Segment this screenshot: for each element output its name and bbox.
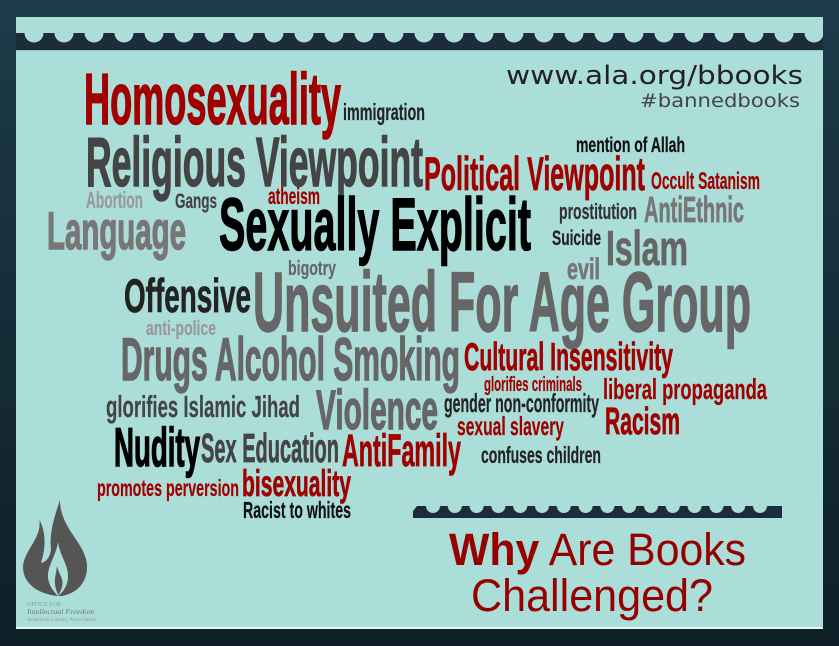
- logo text: Intellectual Freedom: [26, 607, 95, 616]
- word cloud: AntiEthnic: [644, 189, 744, 230]
- icon: flame logo: [23, 500, 87, 596]
- word cloud: Sex Education: [201, 425, 339, 471]
- word cloud: Occult Satanism: [651, 168, 760, 195]
- word cloud: [47, 60, 768, 523]
- word cloud: prostitution: [559, 199, 637, 224]
- word cloud: promotes perversion: [97, 475, 239, 501]
- word cloud: confuses children: [481, 442, 601, 468]
- word cloud: bisexuality: [242, 463, 351, 504]
- word cloud: Language: [47, 202, 186, 261]
- word cloud: Islam: [606, 222, 688, 276]
- word cloud: evil: [567, 253, 600, 286]
- word cloud: Racism: [605, 401, 680, 443]
- logo text: OFFICE FOR: [27, 601, 62, 608]
- word cloud: Abortion: [86, 187, 143, 213]
- word cloud: Offensive: [124, 269, 251, 322]
- website url: www.ala.org/bbooks: [506, 61, 803, 91]
- word cloud: sexual slavery: [457, 411, 564, 441]
- top scalloped band: [16, 17, 823, 51]
- word cloud: glorifies Islamic Jihad: [106, 389, 300, 424]
- word cloud: anti-police: [146, 318, 216, 340]
- word cloud: Homosexuality: [84, 60, 341, 140]
- logo text: American Library Association: [27, 618, 97, 623]
- heading: [449, 524, 746, 621]
- word cloud: Sexually Explicit: [219, 183, 531, 266]
- word cloud: Cultural Insensitivity: [464, 336, 673, 379]
- heading: Why Are Books: [449, 524, 746, 575]
- word cloud: Religious Viewpoint: [86, 123, 423, 201]
- word cloud: bigotry: [288, 258, 337, 280]
- word cloud: Political Viewpoint: [424, 147, 645, 200]
- word cloud: Violence: [316, 378, 438, 441]
- word cloud: Drugs Alcohol Smoking: [121, 326, 460, 393]
- word cloud: mention of Allah: [576, 134, 685, 157]
- word cloud: Gangs: [175, 190, 217, 213]
- word cloud: atheism: [268, 183, 320, 209]
- word cloud: gender non-conformity: [444, 388, 599, 418]
- heading: Challenged?: [471, 570, 713, 621]
- word cloud: immigration: [343, 99, 425, 125]
- word cloud: glorifies criminals: [484, 374, 582, 396]
- logo text: [26, 601, 97, 623]
- lower scalloped divider: [413, 500, 782, 518]
- word cloud: Nudity: [114, 416, 200, 478]
- word cloud: Racist to whites: [243, 497, 351, 523]
- word cloud: AntiFamily: [342, 425, 461, 476]
- word cloud: Suicide: [552, 227, 601, 250]
- hashtag: #bannedbooks: [640, 90, 800, 112]
